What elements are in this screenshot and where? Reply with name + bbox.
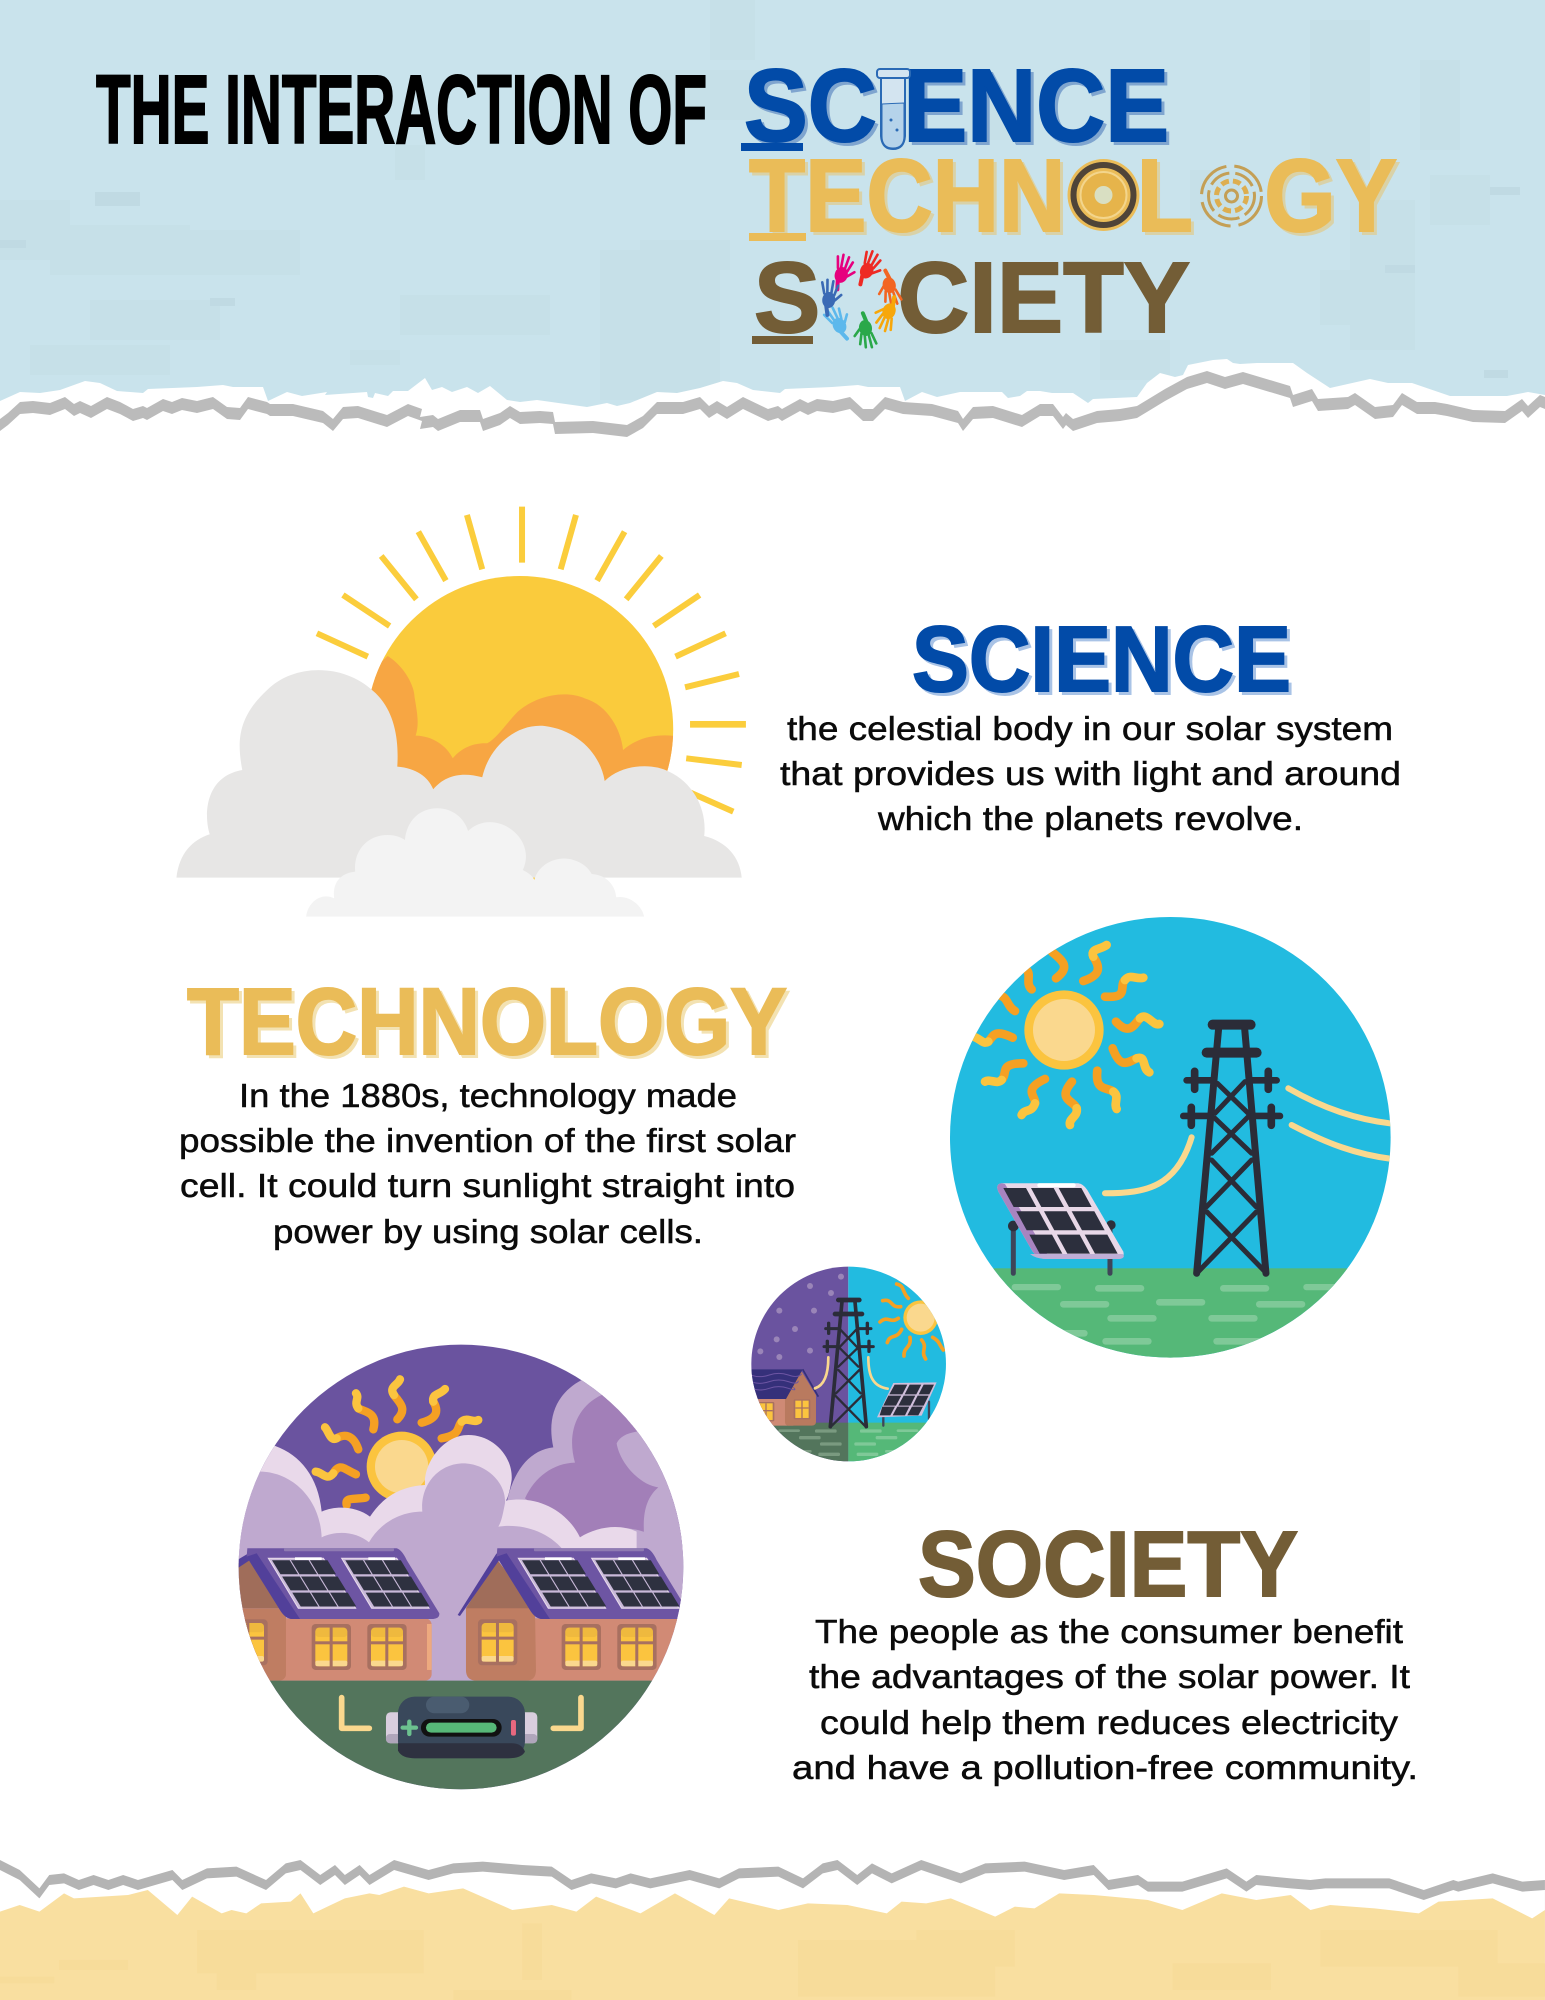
- large cloud: [176, 670, 742, 878]
- text: society description: the advantages of the solar power. It: [809, 1658, 1410, 1695]
- back clouds: [507, 1380, 687, 1563]
- illustration: houses with solar roofs and battery: [238, 1344, 684, 1790]
- heading: society: SOCIETY: [918, 1512, 1298, 1616]
- front clouds: [239, 1435, 637, 1554]
- text: science definition: the celestial body in our solar system: [787, 710, 1393, 747]
- power cables: [1105, 1088, 1395, 1193]
- sun rays: [973, 945, 1159, 1125]
- title: the interaction of: THE INTERACTION OF: [96, 55, 707, 164]
- text: science definition: which the planets revolve.: [877, 800, 1303, 837]
- illustration: sun behind clouds: [176, 507, 746, 917]
- sun disc: [366, 576, 673, 882]
- small cloud: [306, 808, 644, 917]
- sun: [1024, 990, 1104, 1070]
- underline under S: [741, 143, 803, 151]
- logo word: society: SOCIETY: [754, 242, 1190, 354]
- transmission tower: [1183, 1025, 1280, 1273]
- torn paper edge: top: [0, 359, 1545, 486]
- icon: test tube: [877, 69, 910, 149]
- right house: [458, 1548, 689, 1681]
- solar panel: [997, 1183, 1124, 1273]
- left house: [228, 1548, 439, 1681]
- cables: [815, 1357, 888, 1389]
- text: technology description: [179, 1077, 796, 1250]
- top header background: [0, 0, 1545, 450]
- sun: [903, 1300, 938, 1335]
- illustration: small day and night energy circle: [751, 1266, 946, 1462]
- text: society description: and have a pollution-free community.: [792, 1749, 1418, 1786]
- logo word: technology: TECHNOLOGY: [749, 138, 1397, 253]
- house: [750, 1369, 818, 1426]
- text: society description: The people as the consumer benefit: [815, 1613, 1403, 1650]
- sun rays: [317, 507, 746, 812]
- text: science definition: [780, 710, 1401, 837]
- tower: [824, 1300, 873, 1427]
- text: science definition: that provides us with light and around: [780, 755, 1401, 792]
- icon: camera aperture: [1068, 159, 1140, 231]
- text: technology description: power by using solar cells.: [273, 1213, 703, 1250]
- text: society description: could help them reduces electricity: [820, 1704, 1399, 1741]
- icon: ring of hands: [819, 249, 902, 350]
- heading: science: SCIENCE: [912, 607, 1291, 711]
- battery: [386, 1697, 537, 1758]
- icon: gear circuit: [1202, 166, 1262, 226]
- text: technology description: possible the invention of the first solar: [179, 1122, 796, 1159]
- torn paper edge and sand footer: [0, 1860, 1545, 2000]
- text: technology description: cell. It could turn sunlight straight into: [180, 1167, 795, 1204]
- sun: [367, 1432, 437, 1502]
- brackets: [342, 1698, 581, 1728]
- ground: [270, 1680, 652, 1790]
- underline under S: [752, 336, 813, 344]
- sun rays: [316, 1379, 478, 1505]
- logo word: science: SCIENCE: [744, 48, 1169, 163]
- text: technology description: In the 1880s, technology made: [239, 1077, 737, 1114]
- illustration: sun, solar panel and power tower: [950, 917, 1391, 1358]
- sun shade: [372, 656, 673, 789]
- text: society description: [792, 1613, 1418, 1786]
- underline under T: [749, 233, 806, 241]
- panel: [877, 1382, 937, 1426]
- heading: technology: TECHNOLOGY: [187, 969, 787, 1075]
